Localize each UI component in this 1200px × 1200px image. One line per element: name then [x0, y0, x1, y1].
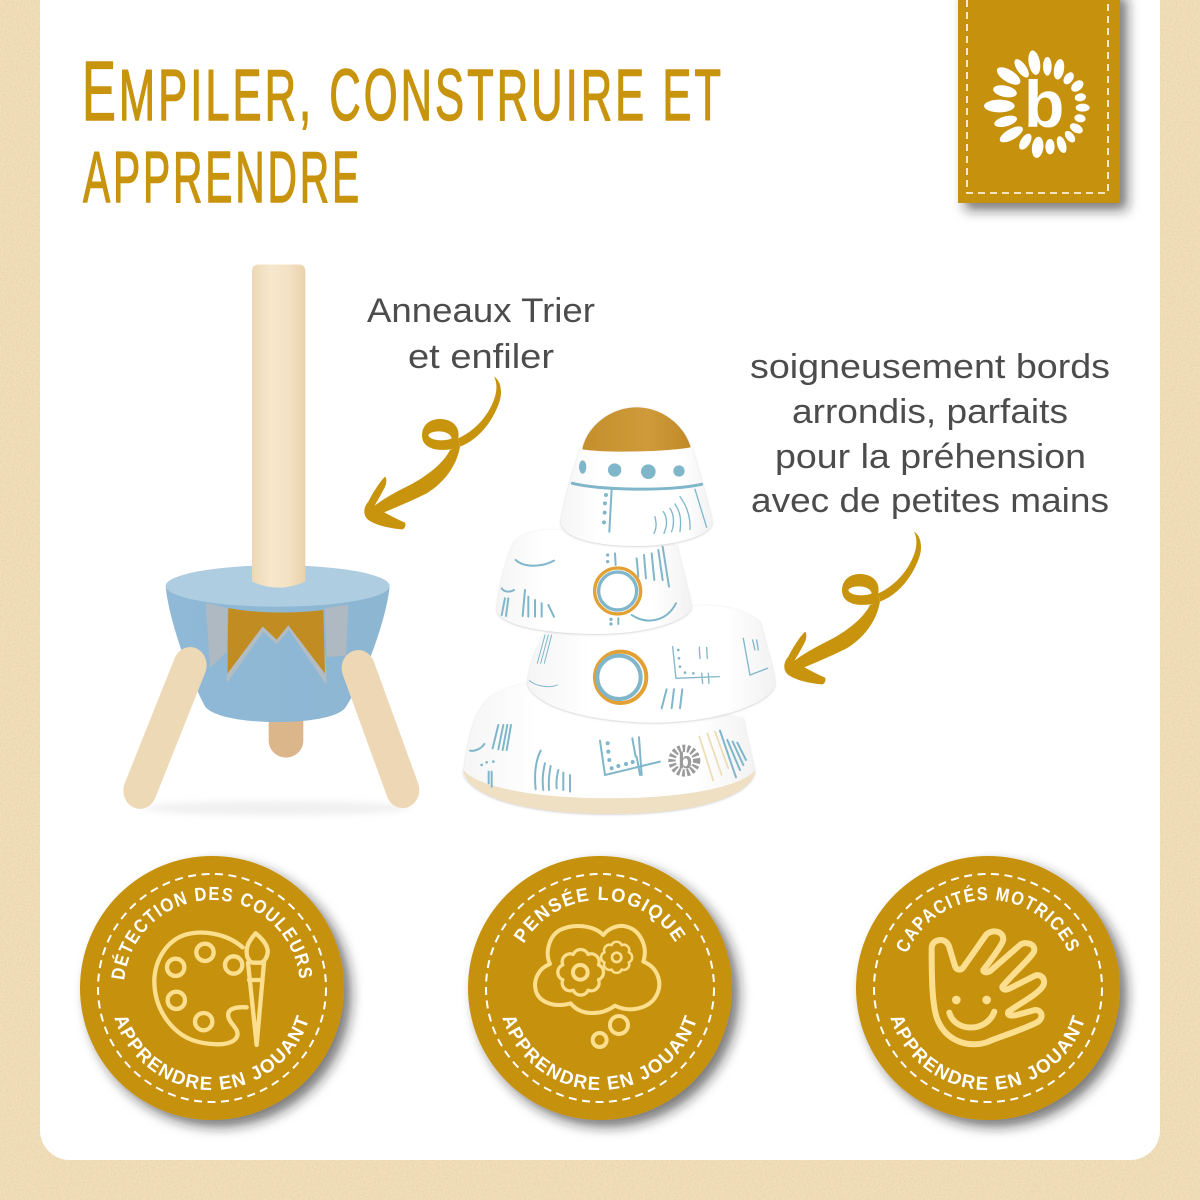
grey flags — [206, 603, 227, 668]
icon: smiling hand — [932, 931, 1044, 1044]
wooden post — [252, 265, 305, 588]
label: anneaux — [367, 292, 595, 376]
mustard flag — [227, 608, 325, 674]
label: bords arrondis — [750, 348, 1110, 520]
logo tag — [958, 0, 1120, 203]
title: EMPILER, CONSTRUIRE ET — [82, 44, 724, 138]
third ring — [527, 606, 775, 723]
dome — [582, 407, 691, 452]
arrow: to rings — [784, 532, 921, 684]
badge: détection des couleurs — [78, 854, 360, 1136]
label: bords arrondis: avec de petites mains — [751, 482, 1109, 520]
label: anneaux: et enfiler — [408, 338, 554, 376]
front legs — [140, 665, 190, 791]
second ring — [497, 530, 692, 634]
product: stacked white rings with dome — [463, 407, 775, 814]
badge: capacités motrices — [854, 854, 1136, 1136]
bottom ring: b — [678, 748, 692, 774]
badge: détection des couleurs: DÉTECTION DES COULEURS — [111, 886, 312, 980]
icon: flower logo: b — [1024, 67, 1064, 141]
title — [82, 44, 724, 218]
blue base — [166, 586, 390, 722]
label: bords arrondis: arrondis, parfaits — [792, 393, 1068, 431]
bottom ring — [463, 683, 755, 814]
badge: pensée logique: APPRENDRE EN JOUANT — [502, 1014, 696, 1090]
top cone — [561, 407, 712, 546]
title: APPRENDRE — [83, 138, 362, 218]
icon: thought cloud with gears — [535, 926, 659, 1047]
label: bords arrondis: pour la préhension — [775, 438, 1086, 476]
icon: flower logo — [984, 50, 1090, 159]
badge: capacités motrices: CAPACITÉS MOTRICES — [896, 884, 1079, 952]
badge: détection des couleurs: APPRENDRE EN JOUANT — [114, 1014, 308, 1090]
label: bords arrondis: soigneusement bords — [750, 348, 1110, 386]
arrow: to post — [364, 377, 501, 529]
product: blue base with wooden post — [140, 265, 410, 815]
badge: pensée logique: PENSÉE LOGIQUE — [514, 886, 686, 943]
back leg — [269, 715, 303, 758]
label: anneaux: Anneaux Trier — [367, 292, 595, 330]
icon: palette and brush — [154, 933, 268, 1045]
badge: capacités motrices: APPRENDRE EN JOUANT — [890, 1014, 1084, 1090]
badge: pensée logique — [466, 854, 748, 1136]
